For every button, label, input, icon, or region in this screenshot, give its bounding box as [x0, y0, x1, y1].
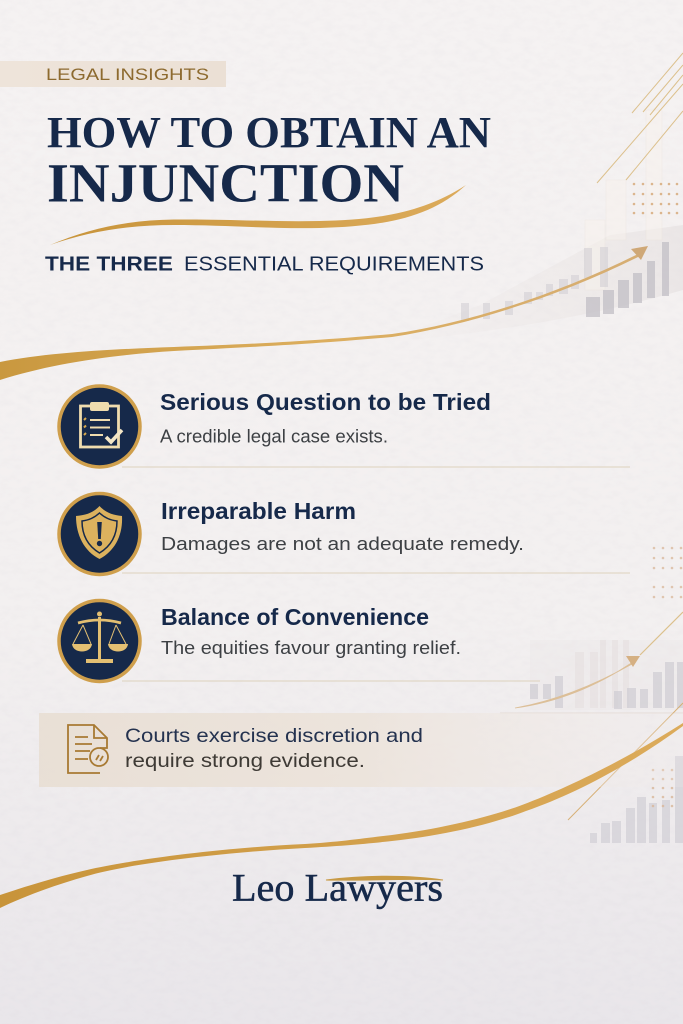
description: A credible legal case exists. — [160, 426, 388, 446]
title — [47, 108, 491, 214]
heading: Serious Question to be Tried — [160, 389, 491, 415]
requirement 3 — [59, 600, 461, 682]
title: HOW TO OBTAIN AN — [47, 108, 491, 157]
eyebrow band: legal insights: LEGAL INSIGHTS — [46, 66, 209, 84]
subtitle: THE THREE — [45, 252, 173, 276]
eyebrow band: legal insights — [0, 61, 226, 87]
callout text: Courts exercise discretion and — [125, 725, 423, 747]
icon: document with seal — [68, 725, 108, 773]
callout text: require strong evidence. — [125, 750, 365, 772]
description: Damages are not an adequate remedy. — [161, 533, 524, 554]
description: The equities favour granting relief. — [161, 637, 461, 658]
callout panel — [39, 713, 683, 787]
logo: Leo Lawyers: Leo Lawyers — [232, 866, 443, 910]
lower gold swoosh — [0, 723, 683, 908]
requirement 2 — [59, 494, 524, 574]
icon: clipboard checklist — [59, 386, 140, 467]
heading: Balance of Convenience — [161, 604, 429, 630]
main gold swoosh with arrow — [0, 246, 648, 380]
subtitle: ESSENTIAL REQUIREMENTS — [184, 252, 484, 276]
mid right decorative chart — [500, 547, 683, 713]
callout text — [125, 725, 423, 772]
upper right decorative chart — [380, 53, 683, 343]
title swoosh — [50, 185, 466, 245]
divider 3 — [122, 680, 540, 682]
icon: warning shield — [59, 494, 140, 574]
heading: Irreparable Harm — [161, 498, 356, 524]
divider 2 — [122, 572, 630, 574]
lower right decorative chart — [568, 703, 683, 843]
icon: balance scales — [59, 600, 140, 682]
subtitle — [45, 252, 484, 276]
divider 1 — [122, 466, 630, 468]
requirement 1 — [59, 386, 491, 467]
title: INJUNCTION — [47, 152, 404, 214]
